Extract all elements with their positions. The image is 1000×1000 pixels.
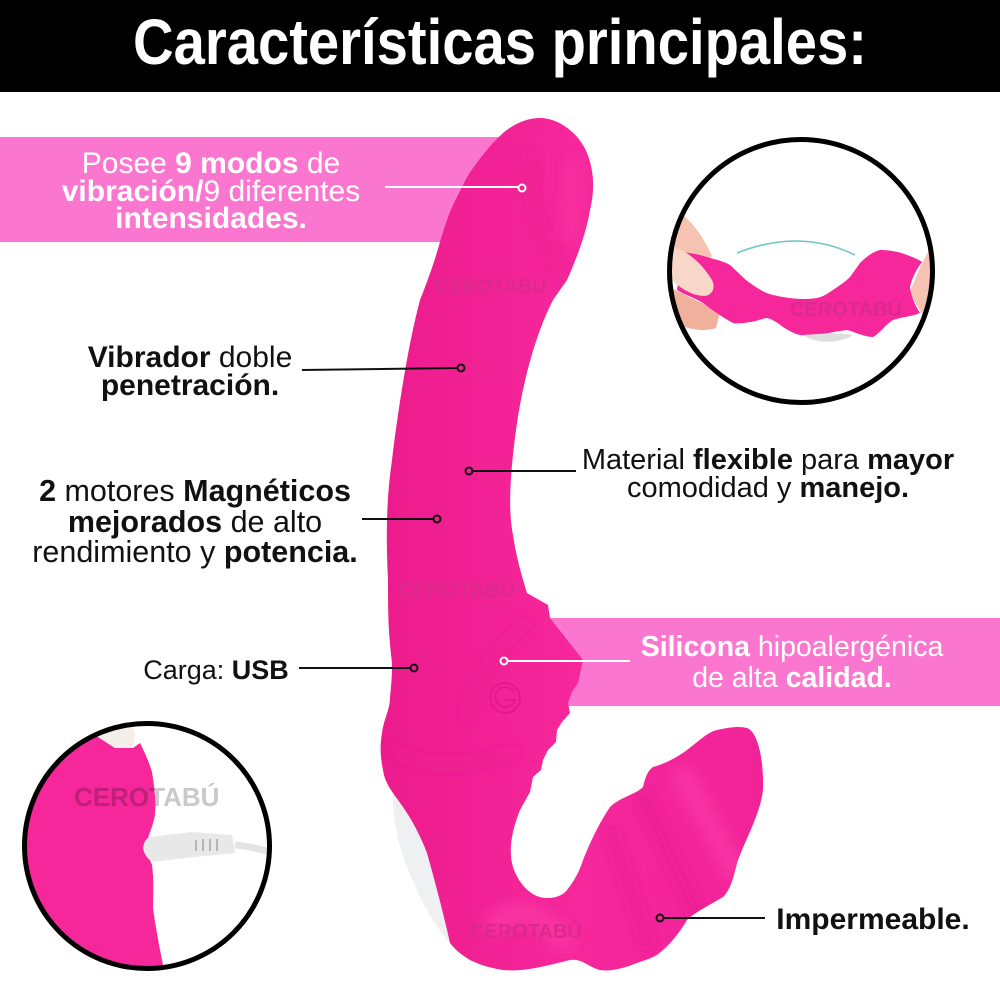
- text: vibration modes: Posee 9 modos de: [82, 147, 340, 180]
- text: double penetration: Vibrador doble: [88, 341, 292, 374]
- inset circle: flexibility: [667, 137, 935, 405]
- text: silicone: [641, 631, 944, 694]
- watermark: flexibility inset: CEROTABÚ: [790, 299, 902, 321]
- title banner: [0, 0, 1000, 92]
- watermark: bottom: CEROTABÚ: [470, 921, 582, 943]
- text: motors: mejorados de alto: [68, 504, 322, 538]
- text: vibration modes: vibración/9 diferentes: [62, 174, 360, 208]
- text: silicone: Silicona hipoalergénica: [641, 631, 943, 663]
- text: motors: [32, 474, 358, 569]
- text: flexible material: comodidad y manejo.: [627, 472, 909, 504]
- watermark: main: CEROTABÚ: [435, 276, 547, 298]
- inset circle: USB charging: [22, 721, 272, 971]
- text: vibration modes: intensidades.: [115, 202, 307, 235]
- text: double penetration: penetración.: [101, 369, 279, 402]
- text: silicone: de alta calidad.: [692, 662, 892, 694]
- text: USB charging: Carga: USB: [143, 655, 289, 685]
- pink band: top left: [0, 137, 500, 242]
- watermark: USB inset: CEROTABÚ: [74, 782, 219, 812]
- text: flexible material: Material flexible para mayor: [582, 444, 954, 476]
- text: motors: 2 motores Magnéticos: [39, 474, 351, 508]
- text: double penetration: [88, 341, 292, 402]
- text: flexible material: [582, 444, 954, 504]
- text: motors: rendimiento y potencia.: [32, 535, 358, 569]
- watermark: middle: CEROTABÚ: [398, 579, 515, 602]
- text: vibration modes: [62, 147, 360, 235]
- product illustration: [380, 118, 764, 970]
- text: waterproof: Impermeable.: [776, 903, 970, 936]
- pink band: right: [540, 618, 1000, 706]
- title banner: Características principales:: [133, 6, 867, 78]
